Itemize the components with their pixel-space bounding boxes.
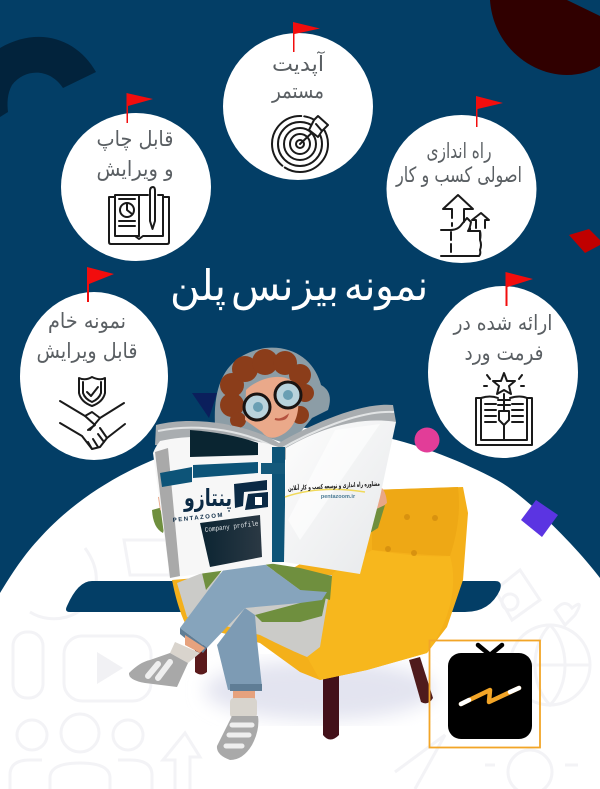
navy bar behind chair — [66, 581, 501, 612]
bubble: business launch — [386, 96, 536, 263]
logo — [173, 480, 268, 524]
right page — [284, 420, 396, 574]
title: بیزنس — [231, 261, 339, 310]
bubble text — [395, 139, 522, 187]
bubble text — [271, 51, 325, 103]
title: نمونه — [344, 261, 428, 310]
bubble: editable raw sample — [20, 267, 168, 460]
faint background doodles — [10, 540, 590, 789]
armchair — [172, 487, 468, 740]
logo: پنتازو — [183, 484, 232, 512]
tv bolt — [461, 688, 519, 704]
icon: shield and handshake — [60, 377, 125, 449]
front leg and shoe — [129, 555, 327, 687]
floor shadow — [205, 660, 435, 720]
bubble text: ارائه شده در — [453, 311, 552, 335]
bubble text: مستمر — [271, 79, 324, 103]
face — [245, 377, 298, 438]
scarf — [215, 348, 330, 445]
icon: thumbs up with arrows — [441, 195, 489, 256]
bubble text: راه اندازی — [426, 139, 492, 163]
purple diamond — [521, 500, 558, 537]
bubble text: فرمت ورد — [464, 341, 544, 365]
bubble: regular update — [223, 22, 373, 180]
title: پلن — [170, 261, 226, 311]
app badge — [430, 640, 540, 748]
bubble text: قابل چاپ — [96, 127, 174, 151]
logo: PENTAZOOM — [173, 513, 224, 524]
badge frame — [430, 640, 540, 748]
bubble text: قابل ویرایش — [36, 339, 138, 363]
bubble text: و ویرایش — [96, 157, 174, 181]
bubble text — [96, 127, 174, 181]
magazine — [153, 405, 396, 578]
icon: open book with pencil — [109, 187, 169, 244]
bubble text — [36, 309, 138, 363]
flag — [293, 22, 320, 52]
right page: مشاوره راه اندازی و توسعه کسب و کار آنلاین — [288, 479, 380, 492]
head — [215, 348, 330, 445]
tv antenna — [478, 645, 502, 655]
dark navy shape behind head — [192, 393, 217, 418]
decorative dark arc — [0, 37, 96, 117]
green jacket — [202, 558, 332, 622]
decorative red diamond — [569, 229, 600, 253]
bubble text: اصولی کسب و کار — [395, 163, 522, 187]
flag — [506, 272, 533, 306]
hands and sleeves — [152, 485, 387, 536]
bubble: printable and editable — [61, 93, 211, 261]
pink circle — [414, 428, 440, 452]
icon: target with arrow — [272, 116, 328, 172]
right page: pentazoom.ir — [321, 494, 356, 500]
bubble: word format — [428, 272, 578, 458]
flag — [87, 267, 114, 302]
icon: book with star — [476, 373, 532, 445]
left page — [153, 430, 285, 578]
illustration: girl reading in armchair — [129, 348, 468, 760]
bubble text — [453, 311, 552, 365]
hair — [220, 349, 314, 428]
tv body — [448, 653, 532, 739]
flag — [126, 93, 153, 123]
left page: Company profile — [204, 520, 259, 535]
flag — [476, 96, 503, 127]
back leg and shoe — [217, 608, 262, 760]
title — [170, 261, 428, 311]
decorative dark red circle — [490, 0, 600, 75]
white lower curve — [0, 428, 600, 789]
bubble text: نمونه خام — [48, 309, 126, 333]
bubble text: آپدیت — [272, 51, 325, 76]
